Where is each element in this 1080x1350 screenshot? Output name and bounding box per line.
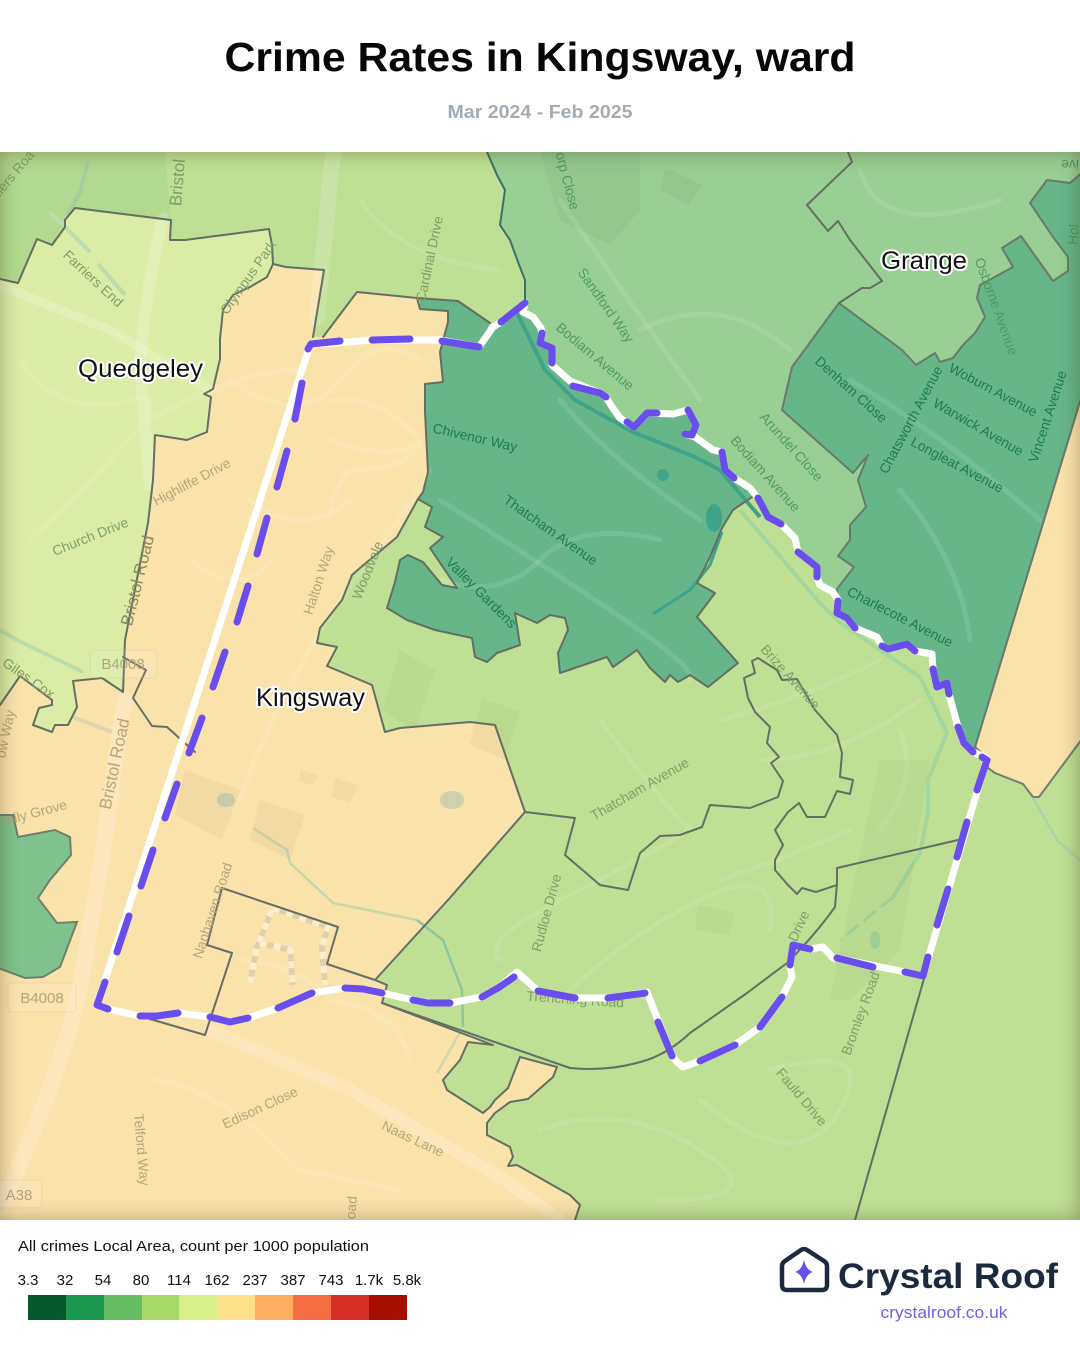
road name labels: Valley Gardens [443,555,520,631]
title: Crime Rates in Kingsway, ward [224,34,856,80]
road name labels: Naas Lane [379,1118,447,1160]
rivers and ponds [0,162,1080,1073]
logo wordmark: Crystal Roof [838,1257,1058,1296]
road name labels: Brize Avenue [758,642,823,712]
road name labels: Warwick Avenue [931,395,1026,459]
road shield: B4008 lower: B4008 [20,990,64,1007]
legend values: 114 [167,1272,191,1289]
road name labels: Bodiam Avenue [553,320,637,393]
legend values [18,1272,422,1289]
region boundary lines [0,152,958,1220]
road name labels: Charlecote Avenue [845,584,956,650]
area: mid-green Grange zone [488,152,1080,590]
road name labels: orp Close [552,150,582,212]
road name labels: ive [1061,157,1079,172]
road name labels: Olympus Park [217,238,279,317]
legend title: All crimes Local Area, count per 1000 population [18,1239,369,1255]
road shield: B4008 lower [8,983,76,1012]
road name labels: Giles Cox [0,655,57,702]
website: crystalroof.co.uk [880,1304,1008,1322]
road name labels: Thatcham Avenue [501,492,601,568]
dashed footpath in Nanhaven block [250,908,328,985]
road name labels: Osborne Avenue [972,256,1021,358]
wiggly river boundary at top [487,152,525,303]
road name labels [0,147,1080,1220]
place labels [78,247,967,712]
legend values: 32 [57,1272,73,1289]
legend values: 743 [318,1272,344,1289]
place labels: Quedgeley [78,355,204,383]
road name labels: Edison Close [220,1084,300,1132]
road name labels: Rudloe Drive [529,872,564,953]
legend values: 3.3 [18,1272,38,1289]
area: Quedgeley pale green [0,208,273,732]
road shield: B4008 upper [90,650,157,678]
road name labels: Woodvale [349,539,386,601]
road name labels: Halton Way [301,545,337,617]
road name labels: Farriers End [60,247,126,310]
road name labels: Fauld Drive [773,1065,830,1129]
Crystal Roof logo [782,1249,1058,1322]
road name labels: Bristol Road [117,533,158,628]
legend values: 1.7k [355,1272,384,1289]
road name labels: oad [343,1195,360,1220]
pale road network [0,152,1040,1220]
legend values: 54 [95,1272,111,1289]
road name labels: Chatsworth Avenue [876,363,946,476]
road name labels: Drive [785,908,813,944]
road name labels: Bristol [166,158,189,207]
area: right orange wedge [975,385,1080,797]
road name labels: Woburn Avenue [946,360,1040,420]
road name labels: Trenching Road [526,989,625,1010]
road name labels: Nanhaven Road [190,861,235,960]
area: Grange dark green [782,170,1080,752]
road name labels: Chivenor Way [431,421,519,455]
road name labels: Vincent Avenue [1026,369,1070,464]
road shield: A38: A38 [6,1187,32,1204]
legend values: 237 [242,1272,268,1289]
legend [18,1239,422,1320]
road name labels: Arundel Close [757,410,826,484]
icon: house with star [782,1249,827,1290]
legend values: 162 [204,1272,230,1289]
place labels: Kingsway [256,684,366,712]
road shield: A38 [0,1180,42,1208]
road name labels: Thatcham Avenue [588,755,692,823]
date range subtitle: Mar 2024 - Feb 2025 [448,101,632,122]
area: darker green top-left [0,152,171,283]
road name labels: Bodiam Avenue [728,433,803,515]
road name labels: Bristol Road [96,717,134,811]
road name labels: Sandford Way [575,266,637,345]
road name labels: Telford Way [131,1113,152,1186]
Kingsway ward boundary [97,303,987,1067]
road name labels: Bromley Road [839,970,883,1057]
legend values: 387 [280,1272,306,1289]
area: Kingsway orange [0,264,580,1220]
road name labels: Church Drive [50,515,131,559]
road name labels: Denham Close [812,354,890,426]
park and building blocks [175,152,930,1000]
area: bottom-left green [0,815,77,978]
place labels: Grange [881,247,967,275]
legend values: 5.8k [393,1272,422,1289]
legend values: 80 [133,1272,149,1289]
legend colour scale [28,1295,407,1320]
road name labels: Highliffe Drive [151,455,233,509]
road name labels: Cardinal Drive [413,214,446,303]
road shield: B4008 upper: B4008 [101,656,145,673]
choropleth map [0,147,1080,1220]
area: Kingsway ward dark green [387,298,752,687]
road name labels: Longleat Avenue [908,434,1006,496]
